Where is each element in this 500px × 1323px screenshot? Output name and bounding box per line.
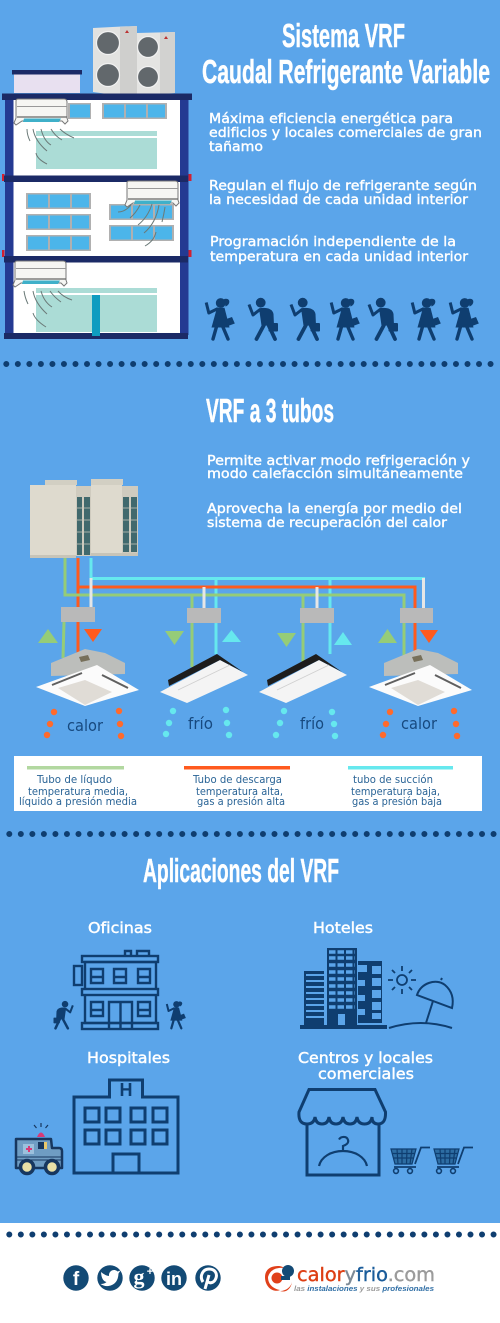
text block: efficiency: edificios y locales comerciales de gran: [209, 125, 482, 141]
flow arrows: [38, 629, 438, 647]
text block: programming: Programación independiente de la: [210, 234, 456, 250]
label: Centros y locales comerciales: Centros y locales: [298, 1049, 433, 1067]
text block: simultaneous mode: modo calefacción simultáneamente: [207, 466, 463, 482]
legend: liquid pipe: líquido a presión media: [19, 796, 137, 808]
label: Centros y locales comerciales: comerciales: [318, 1065, 414, 1083]
columns: [5, 99, 14, 335]
outdoor units: [30, 479, 138, 558]
icon: google plus: +: [147, 1266, 153, 1278]
text block: flow regulation: Regulan el flujo de refrigerante según: [209, 178, 477, 194]
legend: discharge pipe: gas a presión alta: [197, 796, 285, 808]
icon: hospital: [74, 1080, 178, 1173]
heading: VRF a 3 tubos: VRF a 3 tubos: [206, 392, 334, 429]
floors: [2, 94, 192, 100]
building interior: [13, 100, 180, 334]
indoor units: [36, 649, 139, 706]
text block: programming: [210, 234, 468, 265]
illustration: building with air conditioning: [2, 26, 192, 339]
distribution boxes: [61, 607, 433, 623]
roof box: [14, 74, 80, 93]
diagram: three-pipe system: calor: [401, 714, 437, 733]
legend: discharge pipe: [184, 766, 290, 808]
legend: suction pipe: gas a presión baja: [352, 796, 442, 808]
text block: flow regulation: la necesidad de cada unidad interior: [209, 192, 468, 208]
icon: shopping carts: [391, 1148, 473, 1173]
air flow: [24, 129, 165, 327]
footer panel: [0, 1223, 500, 1323]
text block: efficiency: tañamo: [209, 139, 263, 155]
social icons: [63, 1264, 221, 1291]
icon: hospital: H: [120, 1080, 132, 1100]
legend: [14, 756, 482, 811]
text block: efficiency: Máxima eficiencia energética para: [209, 111, 453, 127]
icon: linkedin: [161, 1265, 187, 1291]
text block: simultaneous mode: Permite activar modo refrigeración y: [207, 453, 470, 469]
pipes: [63, 558, 425, 667]
text block: flow regulation: [209, 178, 477, 208]
label: Oficinas: Oficinas: [88, 919, 152, 937]
title: Sistema VRF: [282, 17, 405, 54]
icon: ambulance: [16, 1123, 62, 1174]
text block: programming: temperatura en cada unidad interior: [210, 249, 468, 265]
logo: caloryfrio.com: las instalaciones y sus profesionales: [294, 1284, 434, 1293]
diagram: three-pipe system: frío: [300, 714, 324, 733]
legend: discharge pipe: Tubo de descarga: [192, 774, 282, 786]
text block: heat recovery: sistema de recuperación del calor: [207, 515, 447, 531]
icon: twitter: [97, 1265, 123, 1291]
windows: [26, 103, 174, 251]
text block: heat recovery: [207, 501, 462, 531]
logo: caloryfrio.com: caloryfrio.com: [297, 1264, 435, 1286]
labels: calor: [67, 716, 103, 735]
column blue: [92, 295, 100, 336]
legend: suction pipe: [348, 766, 453, 808]
icon: google plus: g: [134, 1264, 144, 1289]
teal panels: [36, 131, 157, 332]
icon: facebook: [63, 1265, 89, 1291]
icon: pinterest: [195, 1265, 221, 1291]
text block: efficiency: [209, 111, 482, 155]
title: [202, 17, 490, 90]
legend: liquid pipe: Tubo de líqudo: [36, 774, 112, 786]
dots: heat and cold: [44, 708, 460, 739]
red ties: [2, 174, 192, 257]
legend: liquid pipe: [19, 766, 137, 808]
wall units: [14, 99, 68, 125]
text block: simultaneous mode: [207, 453, 470, 482]
icons: walking people: [206, 298, 479, 339]
logo: caloryfrio.com: [265, 1264, 435, 1293]
icon: hotel and beach: [300, 948, 453, 1029]
icon: shop and hanger: [299, 1090, 386, 1175]
label: Centros y locales comerciales: [298, 1049, 433, 1083]
legend: discharge pipe: temperatura alta,: [196, 786, 283, 798]
outdoor unit right: [137, 32, 175, 95]
heading: Aplicaciones del VRF: Aplicaciones del VRF: [143, 852, 339, 889]
text block: heat recovery: Aprovecha la energía por medio del: [207, 501, 462, 517]
icon: google plus: [129, 1264, 155, 1291]
icon: facebook: f: [73, 1269, 80, 1290]
diagram: three-pipe system: frío: [188, 714, 213, 733]
legend: suction pipe: tubo de succión: [353, 774, 433, 786]
diagram: three-pipe system: [30, 479, 472, 739]
outdoor unit left: [93, 26, 137, 97]
icon: office building with people: [54, 951, 186, 1029]
label: Hospitales: Hospitales: [87, 1049, 170, 1067]
legend: liquid pipe: temperatura media,: [28, 786, 128, 798]
icon: linkedin: in: [166, 1269, 182, 1289]
label: Hoteles: Hoteles: [313, 919, 373, 937]
legend: suction pipe: temperatura baja,: [351, 786, 440, 798]
